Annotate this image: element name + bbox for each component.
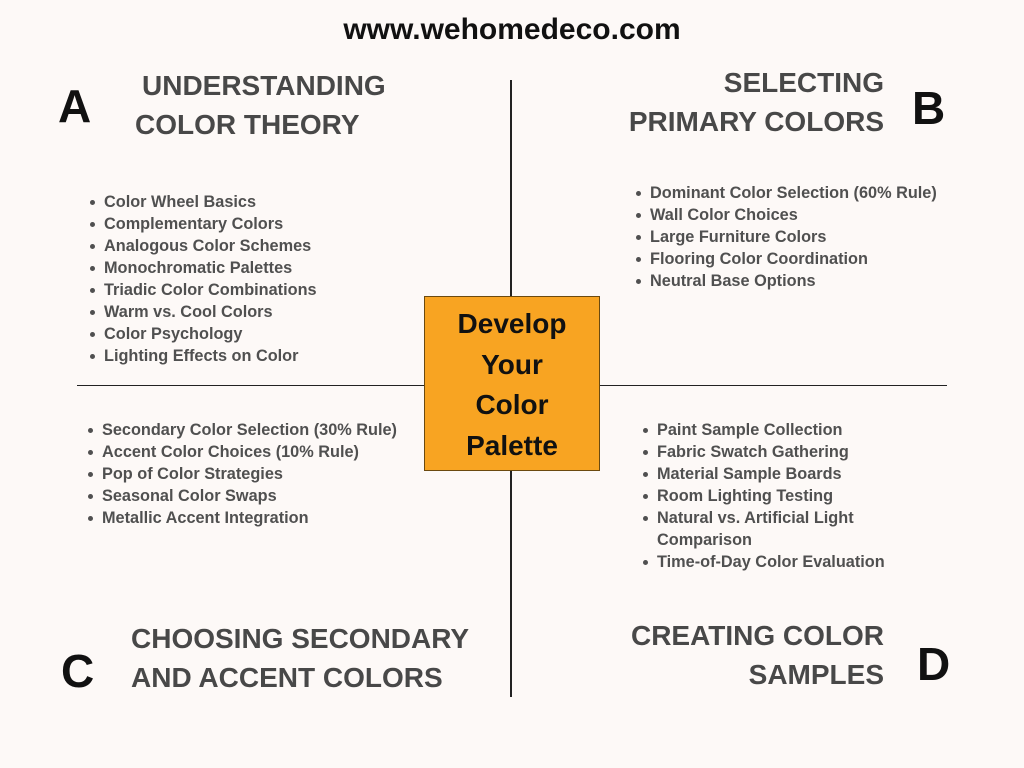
section B heading (629, 67, 884, 137)
section A list: Lighting Effects on Color (104, 347, 298, 365)
section B list: Large Furniture Colors (650, 228, 826, 246)
section C list: Accent Color Choices (10% Rule) (102, 443, 359, 461)
vertical axis line (510, 80, 512, 697)
section B list: Neutral Base Options (650, 272, 816, 290)
section C list: Seasonal Color Swaps (102, 487, 277, 505)
section A list (90, 193, 317, 365)
center box: Color (475, 389, 549, 420)
section D list: Time-of-Day Color Evaluation (657, 553, 885, 571)
section D list: Natural vs. Artificial Light (657, 509, 854, 527)
section A heading (135, 70, 386, 140)
section A list: Complementary Colors (104, 215, 283, 233)
center box: Develop (458, 308, 566, 339)
section B letter: B (912, 82, 945, 134)
section B list: Wall Color Choices (650, 206, 798, 224)
section D list (643, 421, 885, 571)
section C list: Secondary Color Selection (30% Rule) (102, 421, 397, 439)
center box: Palette (466, 430, 558, 460)
section A list: Triadic Color Combinations (104, 281, 317, 299)
section C heading: AND ACCENT COLORS (131, 662, 443, 693)
section C heading: CHOOSING SECONDARY (131, 623, 469, 654)
section C letter: C (61, 645, 94, 697)
section B list: Flooring Color Coordination (650, 250, 868, 268)
section C heading (131, 623, 469, 693)
section D list: Room Lighting Testing (657, 487, 833, 505)
section D heading: CREATING COLOR (631, 620, 884, 651)
section B list: Dominant Color Selection (60% Rule) (650, 184, 937, 202)
section A list: Color Wheel Basics (104, 193, 256, 211)
center box (424, 296, 600, 471)
section A heading: COLOR THEORY (135, 109, 360, 140)
section C list: Pop of Color Strategies (102, 465, 283, 483)
section A list: Color Psychology (104, 325, 242, 343)
section D list: Material Sample Boards (657, 465, 842, 483)
section C list: Metallic Accent Integration (102, 509, 309, 527)
section B heading: PRIMARY COLORS (629, 106, 884, 137)
section D letter: D (917, 638, 950, 690)
website url: www.wehomedeco.com (343, 13, 681, 46)
section D heading (631, 620, 884, 690)
section D heading: SAMPLES (749, 659, 884, 690)
section C list (88, 421, 397, 527)
section A list: Warm vs. Cool Colors (104, 303, 273, 321)
section A list: Analogous Color Schemes (104, 237, 311, 255)
section A list: Monochromatic Palettes (104, 259, 292, 277)
horizontal axis line (77, 384, 947, 386)
section D list: Paint Sample Collection (657, 421, 842, 439)
section A letter: A (58, 80, 91, 132)
section D list: Comparison (657, 531, 752, 549)
section D list: Fabric Swatch Gathering (657, 443, 849, 461)
center box: Your (481, 348, 543, 380)
section B heading: SELECTING (724, 67, 884, 98)
section A heading: UNDERSTANDING (142, 70, 386, 101)
section B list (636, 184, 937, 290)
